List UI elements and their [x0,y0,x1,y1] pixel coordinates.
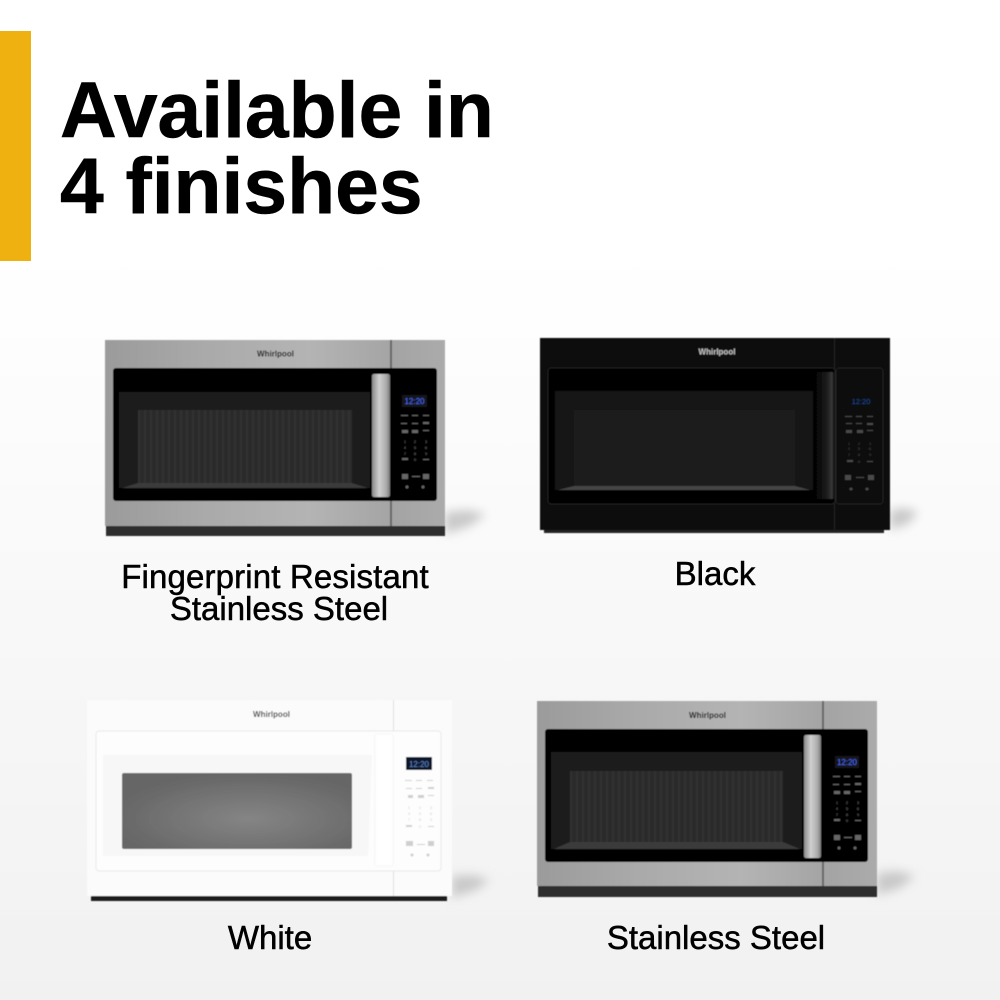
label: fingerprint resistant stainless steel [121,558,429,627]
label: fingerprint resistant stainless steel: Fingerprint Resistant [121,558,429,595]
keypad: 5 [858,446,861,451]
keypad: 5 [419,811,422,816]
keypad: 7 [836,812,839,817]
display: 12:20 [852,397,870,406]
keypad: 1 [408,805,411,810]
label: white: White [228,919,312,956]
keypad: 3 [869,441,872,446]
keypad: 9 [425,451,428,456]
keypad: 2 [414,439,417,444]
keypad: 0 [846,818,849,823]
keypad [833,776,861,850]
keypad: 9 [857,812,860,817]
keypad: 8 [414,451,417,456]
display: 12:20 [409,760,430,769]
keypad: 4 [848,446,851,451]
keypad: 4 [408,811,411,816]
keypad: 5 [846,806,849,811]
keypad: 1 [848,441,851,446]
display [835,756,859,768]
accent bar [0,31,31,261]
microwave: black [540,338,918,533]
keypad: 4 [404,445,407,450]
keypad: 9 [869,452,872,457]
keypad [845,416,874,490]
keypad: 1 [404,439,407,444]
keypad: 7 [848,452,851,457]
keypad: 6 [425,445,428,450]
keypad [405,780,434,856]
keypad: 0 [419,824,422,829]
label: black: Black [675,555,755,592]
label: stainless steel: Stainless Steel [607,919,825,956]
keypad: 8 [846,812,849,817]
microwave: stainless steel [537,701,915,897]
keypad: 6 [430,811,433,816]
keypad: 5 [414,445,417,450]
keypad: 6 [857,806,860,811]
keypad: 1 [836,800,839,805]
keypad: 0 [414,457,417,462]
title: Available in [60,66,494,154]
brand logo: Whirlpool [699,348,735,356]
keypad: 8 [858,452,861,457]
keypad: 4 [836,806,839,811]
brand logo: Whirlpool [689,711,726,720]
keypad: 0 [858,459,861,464]
keypad: 3 [430,805,433,810]
keypad: 2 [419,805,422,810]
keypad: 3 [425,439,428,444]
keypad: 7 [408,817,411,822]
brand logo: Whirlpool [253,710,290,719]
keypad: 8 [419,817,422,822]
microwave: white [87,700,490,901]
keypad: 3 [857,800,860,805]
microwave: fingerprint resistant stainless steel [105,340,486,536]
keypad: 2 [858,441,861,446]
keypad: 6 [869,446,872,451]
label: fingerprint resistant stainless steel: Stainless Steel [170,590,388,627]
title [60,66,494,230]
keypad: 2 [846,800,849,805]
display: 12:20 [837,758,858,767]
title: 4 finishes [60,142,423,230]
display [402,395,427,407]
keypad [401,415,429,488]
display: 12:20 [404,397,425,406]
brand logo: Whirlpool [257,350,294,358]
keypad: 7 [404,451,407,456]
keypad: 9 [430,817,433,822]
display [406,757,432,770]
